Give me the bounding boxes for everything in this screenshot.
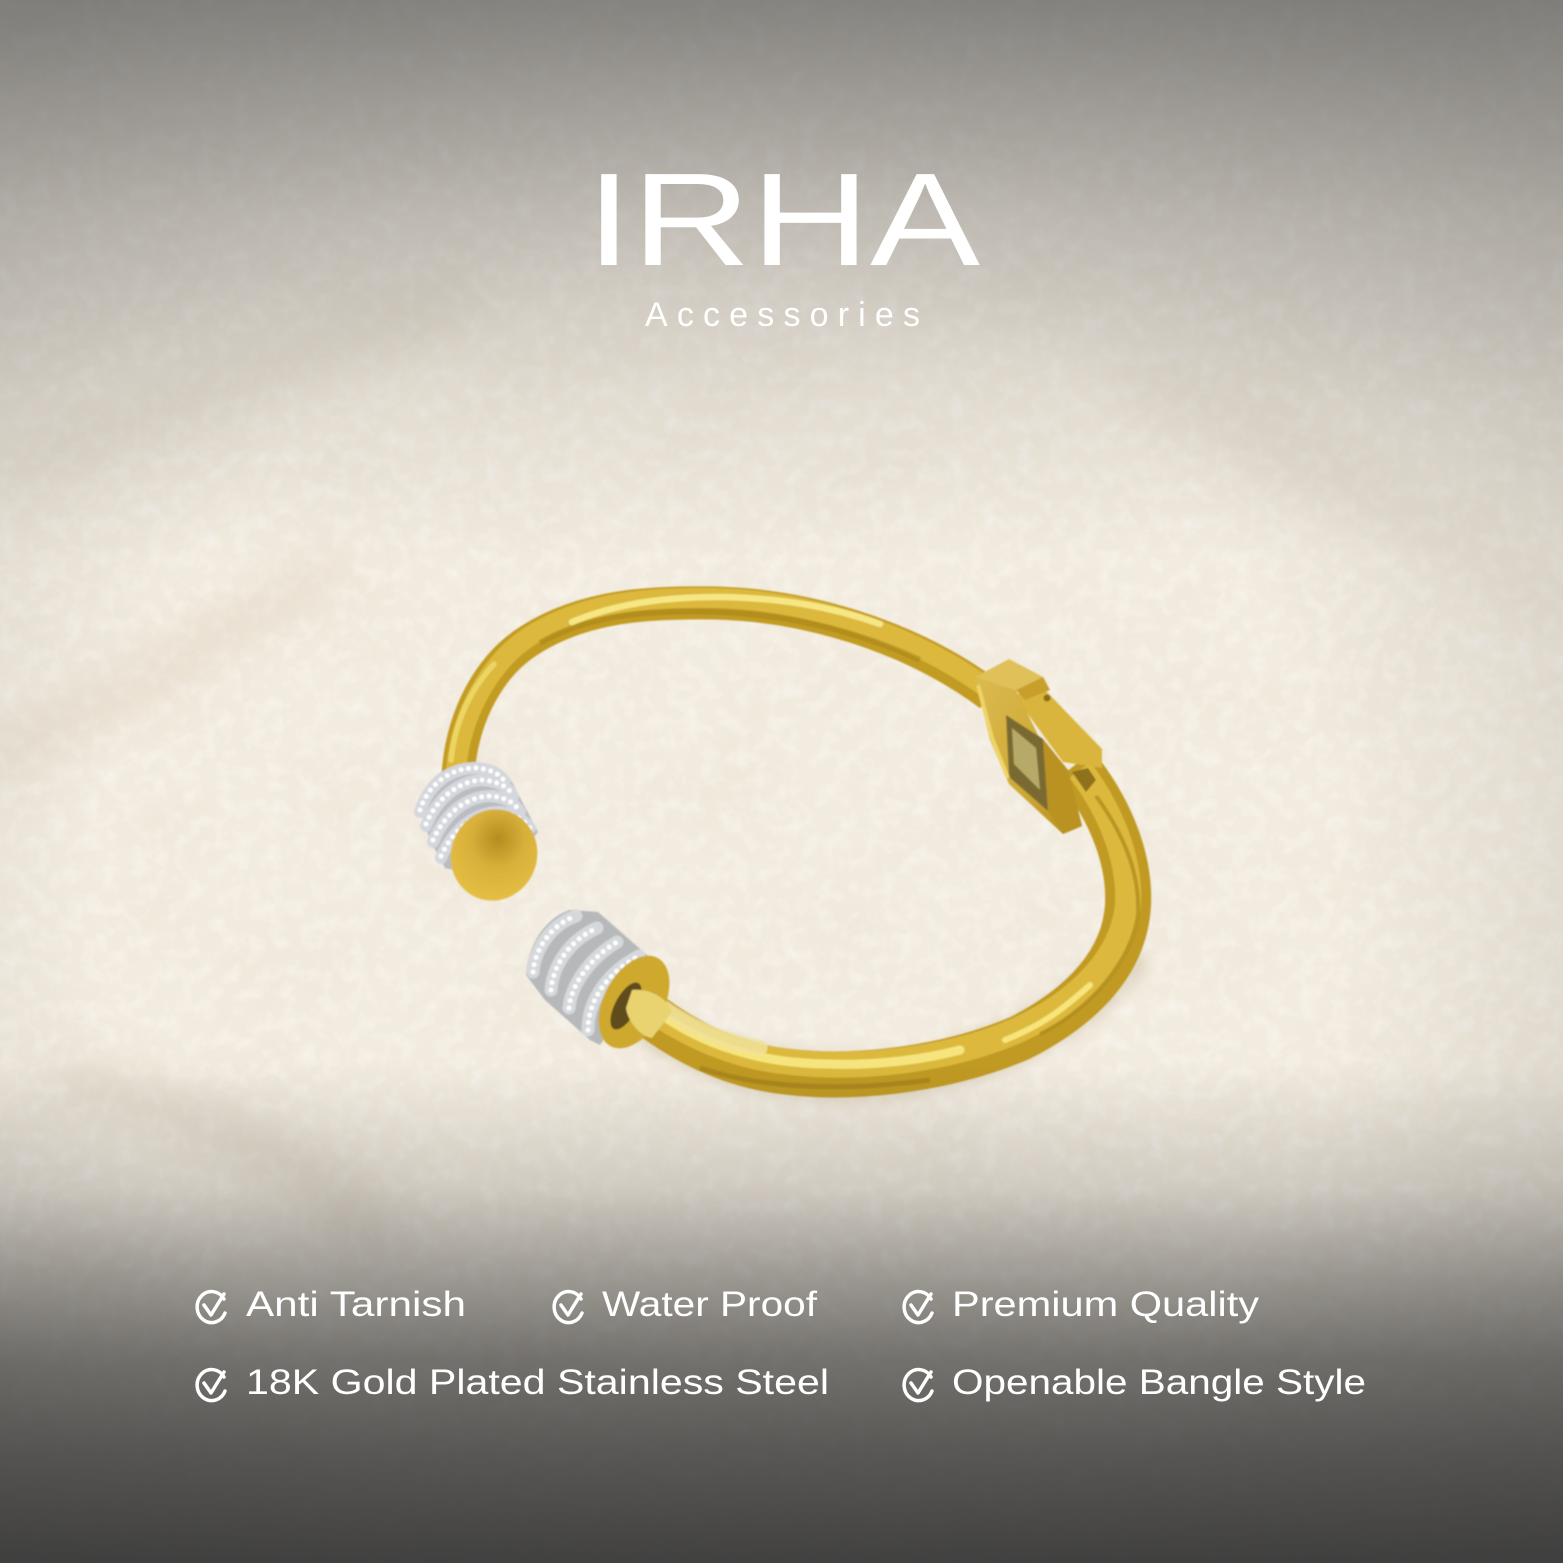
features list — [197, 1285, 1366, 1402]
lower tube — [636, 765, 1138, 1087]
bangle — [418, 597, 1138, 1087]
gold ring collar — [584, 944, 684, 1060]
bangle shadow — [645, 950, 1130, 1077]
feature: water proof: Water Proof — [602, 1285, 817, 1324]
feature: anti tarnish — [197, 1285, 466, 1324]
feature: anti tarnish: Anti Tarnish — [246, 1285, 466, 1324]
brand subtitle: Accessories — [645, 296, 920, 334]
crystal barrel: open end — [418, 763, 538, 880]
upper tube — [451, 597, 990, 775]
feature: openable bangle: Openable Bangle Style — [952, 1363, 1366, 1402]
hinge clasp — [975, 659, 1102, 834]
brand title: IRHA — [586, 146, 980, 293]
feature: gold plated steel: 18K Gold Plated Stainless Steel — [246, 1363, 829, 1402]
crystal barrel: tube end — [526, 910, 655, 1045]
feature: premium quality: Premium Quality — [952, 1285, 1260, 1324]
gold end disk — [438, 797, 550, 913]
